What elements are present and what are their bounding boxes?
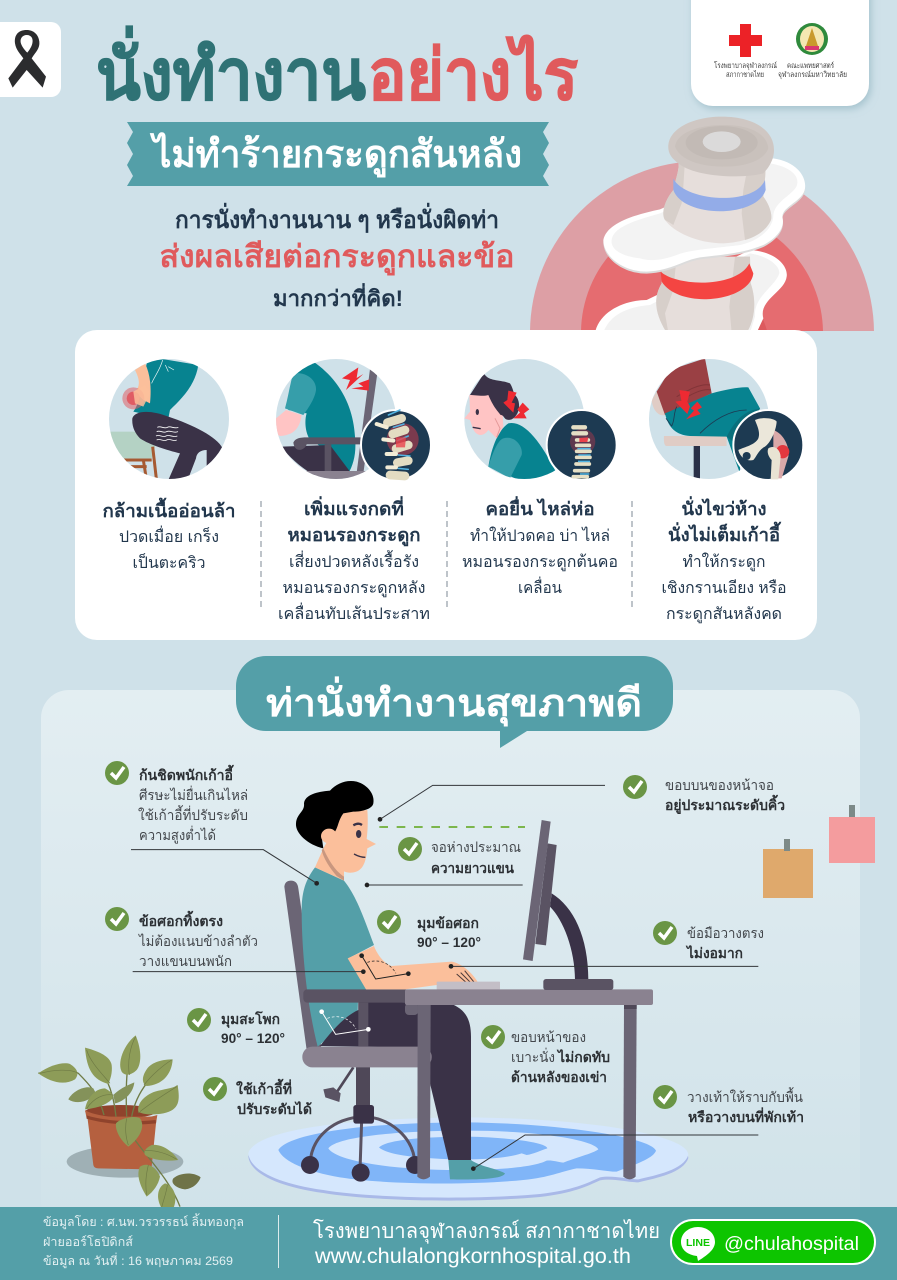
heading and text: muscle fatigue: ปวดเมื่อย เกร็ง xyxy=(119,525,219,546)
black mourning ribbon card xyxy=(0,22,61,97)
heading and text: disc pressure: หมอนรองกระดูก xyxy=(288,525,420,547)
heading and text: crossed legs: นั่งไขว่ห้าง xyxy=(682,496,766,519)
heading and text: muscle fatigue: เป็นตะคริว xyxy=(132,552,206,572)
upper vertebra xyxy=(664,164,746,244)
heading and text: forward neck: หมอนรองกระดูกต้นคอ xyxy=(462,553,618,572)
heading and text: crossed legs xyxy=(662,496,786,624)
callout leader lines xyxy=(131,785,758,1171)
callout: wrist: ไม่งอมาก xyxy=(685,944,743,961)
callout: feet flat: วางเท้าให้ราบกับพื้น xyxy=(687,1087,803,1105)
callout: elbows down xyxy=(105,907,258,969)
LINE badge: @chulahospital xyxy=(724,1234,859,1255)
callout: back against chair: ก้นชิดพนักเก้าอี้ xyxy=(139,764,234,783)
panel: effects of bad sitting xyxy=(75,330,817,640)
legs xyxy=(320,1002,471,1160)
heading and text: crossed legs: เชิงกรานเอียง หรือ xyxy=(662,579,786,597)
hip angle marker xyxy=(319,1009,371,1034)
illustration: person at desk xyxy=(131,781,758,1182)
section heading pill xyxy=(236,656,673,748)
callout: back against chair: ความสูงต่ำได้ xyxy=(139,826,216,844)
eye level dashed line xyxy=(379,824,525,829)
heading and text: crossed legs: กระดูกสันหลังคด xyxy=(666,606,782,624)
LINE badge xyxy=(671,1220,875,1264)
icon: red cross xyxy=(729,24,762,57)
title xyxy=(96,25,578,114)
illustration: spine over red circles xyxy=(530,116,874,331)
heading and text: disc pressure: เพิ่มแรงกดที่ xyxy=(304,496,404,519)
icon: cervical spine inset xyxy=(547,410,617,480)
top cap xyxy=(668,117,774,176)
callout: top of screen: อยู่ประมาณระดับคิ้ว xyxy=(665,794,785,814)
intro text: การนั่งทำงานนาน ๆ หรือนั่งผิดท่า xyxy=(175,202,499,234)
elbow angle marker xyxy=(359,953,411,979)
heading and text: forward neck: ทำให้ปวดคอ บ่า ไหล่ xyxy=(470,526,610,545)
heading and text: forward neck xyxy=(462,496,618,597)
callout: screen distance xyxy=(398,837,521,876)
intro text xyxy=(160,202,514,311)
heading and text: muscle fatigue xyxy=(102,497,236,572)
callout: wrist: ข้อมือวางตรง xyxy=(687,925,764,941)
footer xyxy=(0,1207,897,1280)
logo text xyxy=(714,61,847,79)
callout: feet flat: หรือวางบนที่พักเท้า xyxy=(688,1107,804,1125)
logo card xyxy=(691,0,869,106)
callout: elbows down: ข้อศอกทิ้งตรง xyxy=(139,910,223,929)
callout: hip angle xyxy=(187,1008,285,1046)
hospital name and website: www.chulalongkornhospital.go.th xyxy=(314,1245,631,1268)
icon: crossed legs xyxy=(649,358,769,480)
callout: top of screen xyxy=(623,775,785,814)
title: นั่งทำงาน xyxy=(96,25,366,114)
callout: elbows down: ไม่ต้องแนบข้างลำตัว xyxy=(138,933,258,949)
hospital name and website xyxy=(313,1219,660,1268)
callout: hip angle: 90° – 120° xyxy=(221,1030,285,1046)
sticky note: pink xyxy=(829,805,875,863)
LINE badge: LINE xyxy=(686,1238,710,1249)
icon: tired back muscle xyxy=(109,357,229,482)
arm and hand xyxy=(348,946,479,989)
blue band xyxy=(673,178,766,211)
icon: lumbar spine inset xyxy=(361,410,431,480)
person torso xyxy=(302,867,374,1047)
source credits: ฝ่ายออร์โธปิดิกส์ xyxy=(43,1235,134,1249)
callout: elbow angle: 90° – 120° xyxy=(417,934,481,950)
callout: adjustable chair: ปรับระดับได้ xyxy=(237,1100,312,1117)
callout: adjustable chair xyxy=(203,1077,312,1117)
callout: back against chair: ใช้เก้าอี้ที่ปรับระดับ xyxy=(138,805,248,823)
callout: elbow angle xyxy=(377,910,481,950)
icon: pelvis inset xyxy=(733,410,803,480)
icon: pressure on discs xyxy=(275,359,396,481)
callout: back against chair: ศีรษะไม่ยื่นเกินไหล่ xyxy=(139,786,248,803)
source credits xyxy=(43,1213,244,1269)
chair seat and armrest xyxy=(302,989,432,1067)
red band xyxy=(661,263,753,299)
callout: seat edge: ไม่กดทับ xyxy=(556,1048,610,1065)
section heading pill: ท่านั่งทำงานสุขภาพดี xyxy=(266,676,642,727)
potted plant xyxy=(38,1035,201,1208)
callout: seat edge: เบาะนั่ง xyxy=(511,1048,555,1065)
callout: seat edge: ด้านหลังของเข่า xyxy=(511,1069,607,1085)
panel: healthy posture scene xyxy=(41,690,860,1230)
heading and text: muscle fatigue: กล้ามเนื้ออ่อนล้า xyxy=(102,497,236,521)
logo text: คณะแพทยศาสตร์ xyxy=(787,61,834,70)
foot xyxy=(448,1160,505,1179)
lower vertebra xyxy=(656,256,736,330)
intro text: มากกว่าที่คิด! xyxy=(273,282,403,311)
callout: hip angle: มุมสะโพก xyxy=(221,1010,280,1028)
subtitle ribbon: ไม่ทำร้ายกระดูกสันหลัง xyxy=(149,132,522,178)
icon: faculty emblem xyxy=(796,23,828,55)
callout: screen distance: ความยาวแขน xyxy=(431,860,514,876)
head and neck xyxy=(296,781,376,881)
callout: screen distance: จอห่างประมาณ xyxy=(431,839,521,855)
source credits: ข้อมูลโดย : ศ.นพ.วรวรรธน์ ลิ้มทองกุล xyxy=(43,1213,244,1230)
logo text: สภากาชาดไทย xyxy=(726,70,764,79)
upper disc xyxy=(603,190,805,274)
callout: elbow angle: มุมข้อศอก xyxy=(417,915,479,932)
icon: forward neck xyxy=(464,359,584,483)
subtitle ribbon xyxy=(127,122,549,186)
intro text: ส่งผลเสียต่อกระดูกและข้อ xyxy=(160,239,514,276)
heading and text: disc pressure xyxy=(278,496,430,623)
floor rug xyxy=(248,1117,688,1201)
sticky note: orange xyxy=(763,839,813,898)
source credits: ข้อมูล ณ วันที่ : 16 พฤษภาคม 2569 xyxy=(43,1252,233,1269)
callout: feet flat xyxy=(653,1085,804,1125)
monitor xyxy=(523,820,613,990)
heading and text: disc pressure: เคลื่อนทับเส้นประสาท xyxy=(278,602,430,623)
callout: seat edge xyxy=(481,1025,610,1085)
chair xyxy=(284,881,424,1182)
heading and text: forward neck: เคลื่อน xyxy=(518,576,562,597)
callout: wrist xyxy=(653,921,764,961)
callout: back against chair xyxy=(105,761,248,844)
hospital name and website: โรงพยาบาลจุฬาลงกรณ์ สภากาชาดไทย xyxy=(313,1219,660,1244)
heading and text: disc pressure: เสี่ยงปวดหลังเรื้อรัง xyxy=(289,550,419,571)
callout: adjustable chair: ใช้เก้าอี้ที่ xyxy=(236,1078,292,1097)
heading and text: crossed legs: นั่งไม่เต็มเก้าอี้ xyxy=(668,521,782,545)
title: อย่างไร xyxy=(368,34,578,114)
heading and text: disc pressure: หมอนรองกระดูกหลัง xyxy=(282,580,426,598)
logo text: โรงพยาบาลจุฬาลงกรณ์ xyxy=(714,61,777,70)
callout: seat edge: ขอบหน้าของ xyxy=(511,1029,586,1045)
desk xyxy=(405,982,653,1179)
callout: top of screen: ขอบบนของหน้าจอ xyxy=(665,777,774,793)
heading and text: forward neck: คอยื่น ไหล่ห่อ xyxy=(486,496,594,519)
logo text: จุฬาลงกรณ์มหาวิทยาลัย xyxy=(778,70,847,79)
heading and text: crossed legs: ทำให้กระดูก xyxy=(682,552,766,572)
lower disc xyxy=(595,250,787,333)
callout: elbows down: วางแขนบนพนัก xyxy=(139,953,232,969)
